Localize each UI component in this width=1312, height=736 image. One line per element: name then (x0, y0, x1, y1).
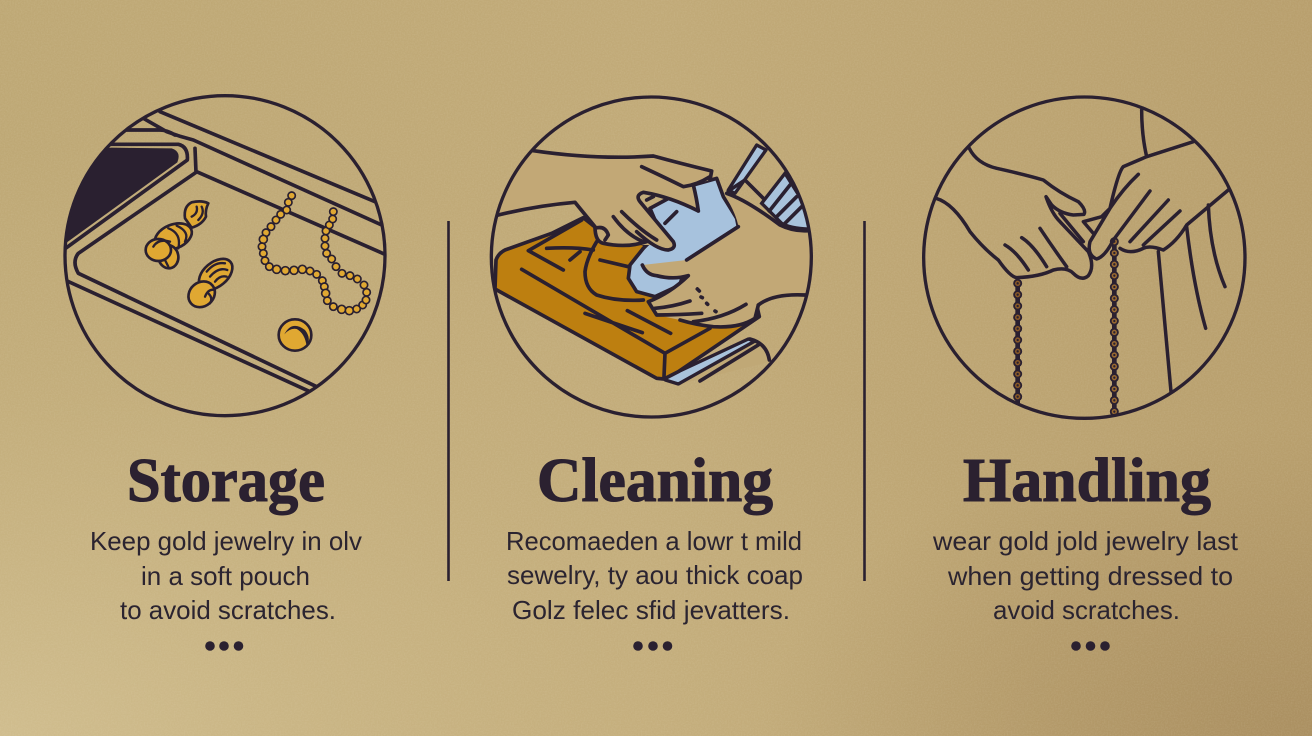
gold chains (1018, 242, 1114, 415)
icon: jewelry tray (60, 96, 385, 416)
gold nugget (279, 319, 311, 351)
text: storage description: to avoid scratches. (120, 595, 336, 625)
panel: handling (924, 97, 1245, 651)
folded cloth book (495, 218, 770, 385)
text: storage description (90, 526, 362, 625)
text: storage description: Keep gold jewelry in olv (90, 526, 362, 556)
panel: storage (60, 96, 385, 651)
dots: storage (205, 641, 243, 651)
heading: handling: Handling (963, 447, 1211, 515)
text: handling description: wear gold jold jewelry last (932, 526, 1239, 556)
text: handling description: when getting dressed to (947, 561, 1233, 591)
text: storage description: in a soft pouch (141, 561, 310, 591)
text: cleaning description (506, 526, 803, 625)
heading: storage: Storage (127, 447, 325, 515)
panel: cleaning (480, 97, 817, 651)
blue cloth (628, 178, 738, 297)
dots: cleaning (633, 641, 672, 651)
upper left hand (502, 153, 708, 248)
text: handling description (932, 526, 1239, 625)
text: cleaning description: Golz felec sfid jevatters. (512, 595, 790, 625)
text: cleaning description: sewelry, ty aou thick coap (507, 560, 803, 590)
divider right (863, 221, 866, 581)
icon: hands holding chain (924, 97, 1245, 418)
dots: handling (1071, 641, 1110, 651)
heading: cleaning: Cleaning (537, 447, 773, 515)
strap stripes (728, 145, 813, 229)
hand lines (936, 110, 1228, 392)
divider left (447, 221, 450, 581)
text: handling description: avoid scratches. (993, 595, 1180, 625)
earring: middle (183, 253, 238, 313)
earring: left (146, 201, 208, 270)
icon: hands cleaning with cloth (480, 97, 817, 417)
bead necklace (258, 192, 370, 315)
lower right hand (644, 198, 808, 326)
text: cleaning description: Recomaeden a lowr t mild (506, 526, 802, 556)
